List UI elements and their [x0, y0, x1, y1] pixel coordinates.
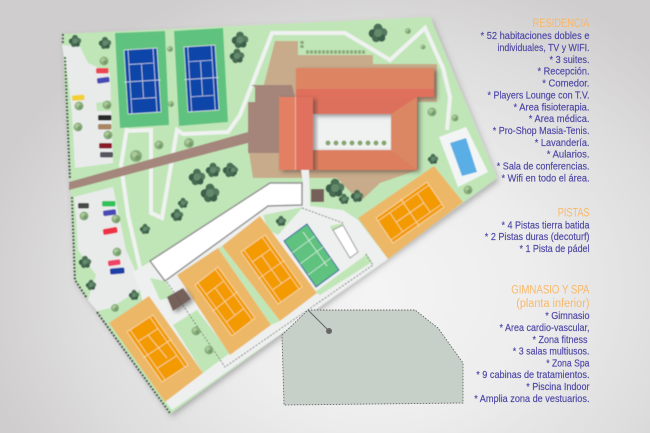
list: residencia: * Wifi en todo el área.	[502, 172, 590, 184]
roof north	[296, 68, 434, 170]
list: residencia: * Sala de conferencias.	[497, 160, 590, 172]
garden paths	[121, 28, 450, 268]
heading: pistas: PISTAS	[558, 207, 590, 219]
hedge row	[302, 41, 366, 52]
site plan map	[62, 17, 497, 414]
heading: gimnasio y spa	[511, 284, 590, 310]
list: gimnasio y spa: * Gimnasio	[545, 310, 590, 322]
hard court green	[284, 224, 339, 287]
courtyard	[313, 114, 391, 150]
list: residencia	[480, 30, 590, 184]
list: residencia: * Aularios.	[547, 149, 590, 161]
site ground	[62, 17, 497, 414]
dotted boundary	[167, 208, 373, 367]
list: gimnasio y spa: * 3 salas multiusos.	[513, 346, 590, 358]
list: residencia: * 3 suites.	[550, 54, 590, 66]
heading: residencia: RESIDENCIA	[532, 18, 590, 30]
small service buildings	[167, 189, 358, 311]
future expansion plot	[282, 310, 463, 405]
heading: gimnasio y spa: (planta inferior)	[516, 298, 590, 310]
list: residencia: * Area médica.	[529, 113, 590, 125]
list: gimnasio y spa: * Area cardio-vascular,	[500, 322, 590, 334]
clay court 3	[177, 248, 271, 355]
list: gimnasio y spa	[474, 310, 590, 405]
car park north	[62, 45, 113, 168]
long white building	[150, 183, 302, 281]
entrance road	[69, 132, 248, 190]
list: pistas: * 1 Pista de pádel	[520, 243, 590, 255]
list: gimnasio y spa: * Zona Spa	[546, 357, 590, 369]
service paved area	[133, 170, 388, 410]
swimming pool	[439, 127, 488, 187]
list: residencia: * 52 habitaciones dobles e	[480, 30, 590, 42]
annex	[248, 85, 295, 153]
roof west	[279, 97, 313, 170]
parked cars	[72, 68, 125, 275]
list: gimnasio y spa: * Piscina Indoor	[526, 381, 590, 393]
list: pistas: * 2 Pistas duras (decoturf)	[485, 231, 590, 243]
list: gimnasio y spa: * Amplia zona de vestuarios.	[474, 393, 590, 405]
list: residencia: individuales, TV y WIFI.	[498, 42, 590, 54]
list: residencia: * Players Lounge con T.V.	[488, 89, 590, 101]
heading: gimnasio y spa: GIMNASIO Y SPA	[511, 284, 590, 296]
list: gimnasio y spa: * Zona fitness	[532, 334, 588, 346]
tennis court blue 1	[115, 31, 169, 128]
list: residencia: * Lavandería.	[535, 137, 590, 149]
green lawns	[150, 207, 372, 373]
terrace	[249, 41, 437, 202]
list: residencia: * Area fisioterapia.	[514, 101, 590, 113]
clay court 2	[222, 216, 317, 321]
list: pistas	[485, 220, 590, 255]
trees	[69, 24, 472, 355]
list: residencia: * Pro-Shop Masia-Tenis.	[493, 125, 590, 137]
list: gimnasio y spa: * 9 cabinas de tratamientos.	[476, 369, 590, 381]
main building	[248, 41, 437, 202]
car park south	[74, 187, 143, 311]
courtyard hedges	[326, 140, 386, 146]
clay court 1	[358, 166, 463, 259]
clay court 4	[109, 296, 203, 402]
list: pistas: * 4 Pistas tierra batida	[502, 220, 590, 232]
plot marker	[308, 310, 332, 334]
list: residencia: * Recepción.	[538, 66, 590, 78]
tennis court blue 2	[174, 28, 228, 126]
perimeter fence	[63, 34, 170, 413]
list: residencia: * Comedor.	[542, 78, 590, 90]
planting islands	[96, 100, 113, 111]
